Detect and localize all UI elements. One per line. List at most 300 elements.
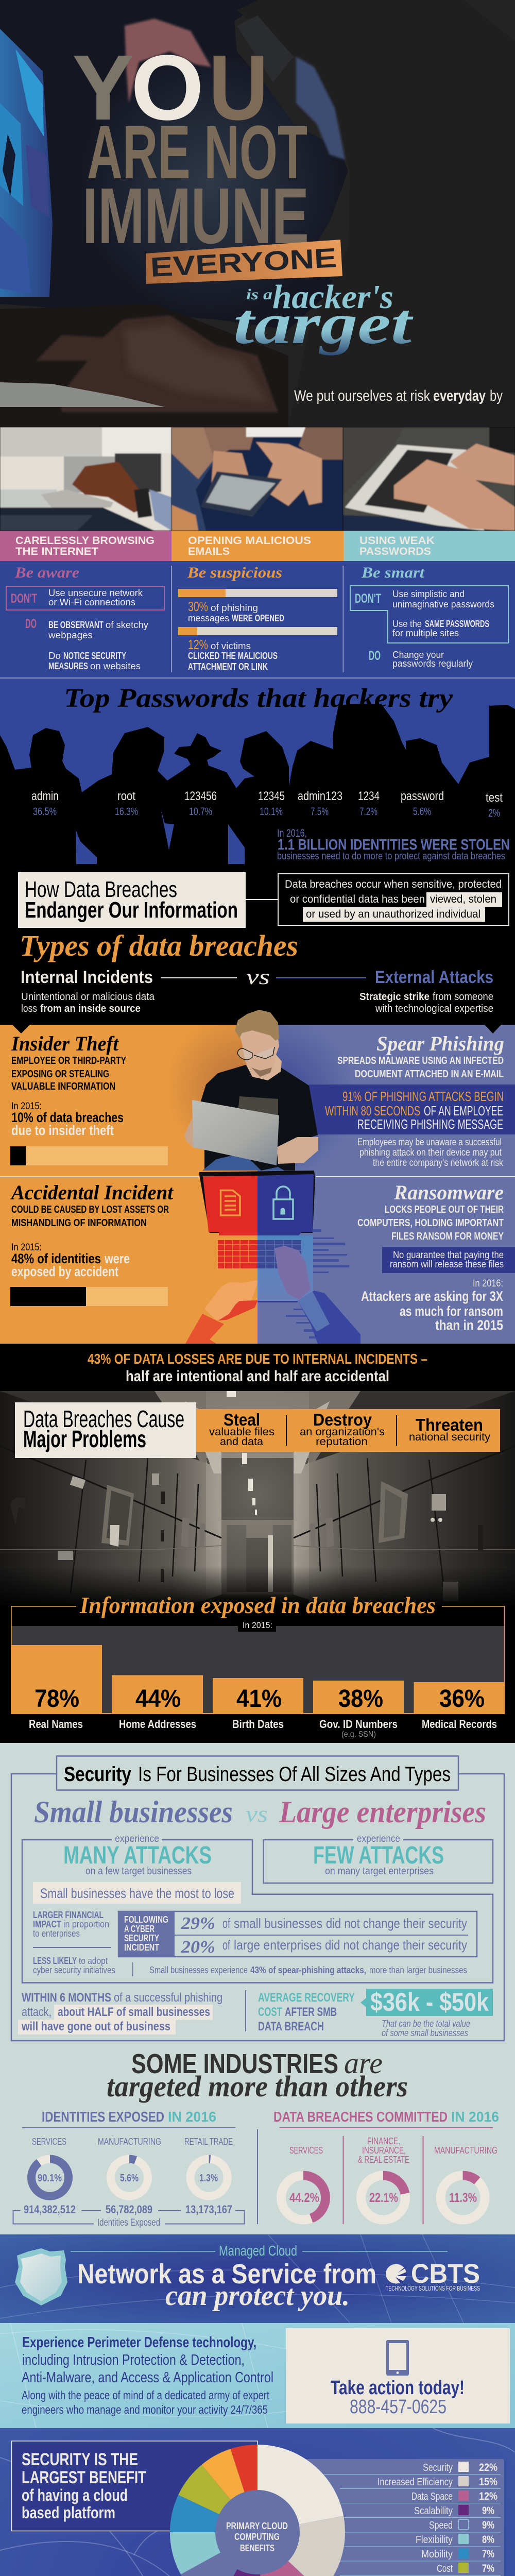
password labels: 1234: [358, 789, 380, 803]
call to action: 888-457-0625: [350, 2396, 447, 2418]
title: you are not immune: U: [209, 36, 268, 140]
card: ransomware: In 2016:: [473, 1278, 503, 1289]
card: insider theft: In 2015:: [11, 1101, 42, 1112]
column: be aware: MEASURES: [48, 661, 88, 671]
category: using weak passwords: PASSWORDS: [359, 546, 431, 557]
heading: security is for businesses: Security: [64, 1763, 132, 1786]
donut: services 90.1: 90.1%: [38, 2173, 62, 2184]
panel: data breaches committed: DATA BREACHES COMMITTED: [273, 2109, 448, 2125]
panel: small business attacks: experience: [115, 1834, 159, 1844]
panel: identities exposed: [13, 2109, 244, 2228]
password labels: test: [486, 791, 503, 805]
advice panel background: [0, 561, 515, 726]
heading: some industries: are: [344, 2046, 383, 2080]
callout: average recovery cost: That can be the total value: [382, 2019, 470, 2029]
pie chart: cloud computing benefits: [170, 2445, 345, 2576]
background streaks: [0, 2428, 515, 2576]
card: accidental incident: COULD BE CAUSED BY LOST ASSETS OR: [11, 1204, 169, 1215]
card: ransomware: [357, 1181, 515, 1333]
internal versus external: loss: [21, 1003, 37, 1014]
column: be smart: Use the: [392, 619, 422, 629]
heading: security is for businesses: Is For Businesses Of All Sizes And Types: [138, 1763, 451, 1786]
problems strip: reputation: [316, 1436, 368, 1448]
column: be aware: of sketchy: [106, 620, 148, 630]
notes: financial impact: to adopt: [79, 1956, 108, 1966]
icon: document: [220, 1190, 240, 1215]
man with laptop: [184, 1010, 318, 1171]
legend panel: Scalability: [414, 2505, 453, 2517]
cabinet seams: [71, 1458, 444, 1594]
column: be smart: [350, 564, 508, 669]
identities exposed bracket: Identities Exposed: [97, 2217, 160, 2228]
cabinet walls: [0, 1391, 221, 1643]
panel: data breaches committed: FINANCE,: [367, 2136, 400, 2146]
heading: how data breaches endanger: [18, 872, 246, 928]
column: be smart: DO: [369, 649, 381, 663]
card: accidental incident: Accidental Incident: [10, 1181, 174, 1204]
internal incidents callout: [0, 1344, 515, 1391]
card: ransomware: Ransomware: [393, 1181, 504, 1204]
problems strip: an organization's: [300, 1426, 385, 1438]
security section background: [0, 1743, 515, 2234]
internal incidents callout: half are intentional and half are accidental: [126, 1368, 389, 1385]
column: be smart: Use simplistic and: [392, 589, 465, 599]
panel: following a cyber incident: A CYBER: [124, 1924, 154, 1934]
box: security largest benefit: of having a cloud: [22, 2486, 128, 2504]
panel: following a cyber incident: 20%: [181, 1938, 215, 1957]
heading: Information exposed in data breaches: [79, 1592, 436, 1618]
legend panel: Security: [423, 2462, 453, 2473]
bar: 48 percent: [10, 1287, 168, 1306]
password labels: root: [117, 789, 135, 803]
column: be aware: DON'T: [11, 591, 37, 606]
panel: large enterprise attacks: experience: [357, 1834, 400, 1844]
callout: within six months: [18, 1990, 246, 2035]
card: accidental incident: [10, 1181, 174, 1306]
dark room background: [0, 0, 348, 330]
banner: managed cloud network as a service: [0, 2234, 515, 2323]
callout: within six months: WITHIN 6 MONTHS: [22, 1991, 111, 2005]
intro line: everyday: [433, 387, 486, 404]
is a hacker's target: target: [233, 292, 414, 356]
notes: financial impact: LARGER FINANCIAL: [33, 1910, 104, 1920]
heading: types of data breaches: Types of data breaches: [20, 929, 298, 962]
column: be aware: webpages: [48, 630, 93, 640]
donut: manufacturing 5.6: [111, 2159, 148, 2196]
problems strip: Threaten: [416, 1415, 483, 1434]
panel: small business attacks: MANY ATTACKS: [63, 1842, 212, 1869]
bar values: 41%: [236, 1685, 282, 1713]
legend panel: Data Space: [411, 2491, 453, 2502]
notes: financial impact: IMPACT: [33, 1919, 61, 1929]
internal versus external: from an inside source: [40, 1003, 141, 1014]
problems strip: [196, 1409, 500, 1452]
column: be smart: Change your: [392, 650, 444, 660]
panel: following a cyber incident: did not change their security: [326, 1916, 467, 1931]
legend panel: 7%: [482, 2563, 494, 2574]
notes: financial impact: more than larger businesses: [369, 1965, 467, 1975]
heading: some industries: targeted more than others: [107, 2070, 408, 2103]
stolen identities stat: In 2016,: [277, 827, 307, 839]
everyone label: [146, 240, 342, 284]
column: be smart: Be smart: [361, 564, 425, 581]
panel: small business attacks: [22, 1834, 493, 1982]
card: accidental incident: In 2015:: [11, 1242, 42, 1253]
wood streaks, blue side: [286, 1229, 349, 1338]
category: carelessly browsing: CARELESSLY BROWSING: [15, 535, 154, 547]
panel: large enterprise attacks: [264, 1834, 493, 1883]
box: security largest benefit: SECURITY IS THE: [22, 2450, 138, 2469]
security frame: [11, 1774, 504, 2041]
callout: within six months: attack,: [22, 2005, 52, 2019]
category: opening malicious emails: [171, 531, 344, 561]
identities exposed bracket: 56,782,089: [106, 2203, 152, 2216]
box: security largest benefit: based platform: [22, 2503, 115, 2522]
category: using weak passwords: USING WEAK: [359, 535, 435, 547]
definition box: [246, 874, 509, 925]
legend panel: Increased Efficiency: [377, 2477, 453, 2488]
column: be suspicious: CLICKED THE MALICIOUS: [188, 651, 278, 661]
bar: 10 percent: [10, 1146, 168, 1165]
donut: manufacturing 11.3: 11.3%: [449, 2191, 477, 2205]
hood and face silhouette: [237, 0, 515, 427]
pie chart: cloud computing benefits: COMPUTING: [234, 2532, 280, 2542]
donut: retail 1.3: [191, 2159, 228, 2196]
panel: data breaches committed: SERVICES: [289, 2145, 323, 2156]
horizontal divider between rows: [0, 1176, 515, 1177]
perimeter defense band: including Intrusion Protection & Detection,: [22, 2352, 245, 2368]
banner: managed cloud network as a service: Managed Cloud: [219, 2243, 297, 2259]
category: carelessly browsing: THE INTERNET: [15, 546, 98, 557]
column: be smart: unimaginative passwords: [392, 599, 494, 609]
problems strip: Steal: [224, 1410, 260, 1429]
panel: following a cyber incident: 29%: [181, 1914, 215, 1933]
panel: large enterprise attacks: FEW ATTACKS: [313, 1842, 444, 1869]
bars: [11, 1645, 505, 1714]
hero section: [0, 0, 515, 427]
password percentages: 10.1%: [260, 806, 283, 818]
title: you are not immune: Y: [72, 36, 134, 140]
logo: CBTS: CBTS: [411, 2259, 480, 2289]
ceiling: [0, 1391, 515, 1494]
perimeter defense band: engineers who manage and monitor your activity 24/7/365: [22, 2403, 268, 2416]
callout: average recovery cost: [258, 1988, 493, 2038]
column: be suspicious: Be suspicious: [187, 564, 282, 581]
perimeter defense band: [0, 2323, 515, 2428]
perimeter defense band: Anti-Malware, and Access & Application Control: [22, 2369, 273, 2386]
password percentages: 7.2%: [359, 806, 377, 818]
callout: average recovery cost: of some small businesses: [382, 2028, 468, 2038]
blue hand and sleeve: [274, 1246, 360, 1344]
labels and handles: [70, 1476, 85, 1489]
how breaches section background: [0, 864, 515, 1025]
category: using weak passwords: [344, 531, 515, 561]
category: opening malicious emails: OPENING MALICIOUS: [188, 535, 311, 547]
laptop lid: [192, 1096, 284, 1171]
bar values: 78%: [35, 1685, 79, 1713]
title: you are not immune: [72, 36, 309, 260]
callout: average recovery cost: AFTER SMB: [285, 2005, 337, 2019]
internal versus external: Unintentional or malicious data: [21, 991, 155, 1003]
donut: finance 22.1: [361, 2176, 405, 2220]
internal versus external: [21, 965, 493, 1014]
photo: phone in hands: [171, 427, 343, 531]
column: be aware: NOTICE SECURITY: [63, 651, 126, 661]
problems strip: national security: [409, 1431, 491, 1443]
column: be suspicious: of victims: [211, 641, 251, 651]
icon: padlock: [273, 1187, 293, 1219]
legend panel: 9%: [482, 2505, 494, 2517]
panel: following a cyber incident: FOLLOWING: [124, 1914, 168, 1925]
small businesses vs large enterprises: vs: [246, 1801, 268, 1827]
card: insider theft: VALUABLE INFORMATION: [11, 1081, 115, 1092]
duotone laptop illustration: [185, 1171, 360, 1344]
intro line: by: [490, 387, 503, 404]
card: spear phishing: Spear Phishing: [376, 1032, 504, 1055]
legend panel: Mobility: [421, 2549, 453, 2560]
column: be aware: Do: [48, 651, 61, 661]
internal versus external: External Attacks: [375, 968, 493, 987]
card: insider theft: due to insider theft: [11, 1123, 114, 1138]
column: be aware: Use unsecure network: [48, 588, 143, 598]
stolen identities stat: [277, 827, 510, 862]
definition box: or confidential data has been: [290, 893, 425, 905]
bar: 30 percent opened: [178, 589, 337, 597]
password percentages: [33, 806, 500, 819]
internal versus external: Strategic strike: [359, 991, 430, 1003]
problems strip: Destroy: [313, 1410, 372, 1429]
category: carelessly browsing: [0, 531, 171, 561]
icon: phone: [386, 2340, 409, 2376]
column: be aware: or Wi-Fi connections: [48, 597, 135, 607]
problems strip: valuable files: [209, 1426, 274, 1438]
donut: services 44.2: 44.2%: [289, 2191, 319, 2205]
column: be suspicious: of phishing: [211, 603, 258, 613]
definition box: viewed, stolen: [430, 893, 496, 905]
heading: some industries: [107, 2046, 408, 2103]
callout: within six months: will have gone out of business: [21, 2020, 170, 2033]
is a hacker's target: [233, 278, 414, 356]
logo: CBTS: [386, 2259, 480, 2292]
column: be aware: BE OBSERVANT: [48, 620, 104, 630]
panel: large enterprise attacks: on many target enterprises: [325, 1866, 434, 1877]
cloud benefits section: [0, 2428, 515, 2576]
bar values: 44%: [135, 1685, 181, 1713]
panel: following a cyber incident: [118, 1911, 477, 1957]
bar labels: Medical Records: [422, 1718, 497, 1731]
panel: identities exposed: RETAIL TRADE: [184, 2137, 233, 2147]
notes: financial impact: to enterprises: [33, 1928, 80, 1939]
internal versus external: Internal Incidents: [21, 968, 153, 987]
heading: data breaches cause major problems: [15, 1402, 196, 1458]
legend panel: Cost: [437, 2563, 453, 2574]
title: you are not immune: O: [131, 36, 204, 140]
panel: identities exposed: MANUFACTURING: [98, 2137, 161, 2147]
internal versus external: with technological expertise: [375, 1003, 493, 1014]
is a hacker's target: is a: [246, 286, 272, 303]
legend panel: [305, 2459, 504, 2576]
bar: 12 percent clicked: [178, 627, 337, 635]
box: security largest benefit: [11, 2441, 258, 2531]
column: be smart: for multiple sites: [392, 628, 459, 638]
password labels: admin123: [298, 789, 342, 803]
chart: information exposed: [0, 1592, 515, 1743]
split panel: orange internal side: [0, 1025, 258, 1344]
small businesses vs large enterprises: [34, 1795, 486, 1829]
identities exposed bracket: 13,173,167: [185, 2203, 232, 2216]
panel: following a cyber incident: did not change their security: [325, 1937, 467, 1953]
legend panel: 7%: [482, 2548, 494, 2560]
heading: Top Passwords that hackers try: [64, 684, 453, 713]
bar labels: Birth Dates: [232, 1718, 284, 1731]
category: opening malicious emails: EMAILS: [188, 546, 230, 557]
hair: [235, 1010, 279, 1041]
callout: within six months: of a successful phishing: [114, 1991, 222, 2005]
password percentages: 2%: [488, 807, 500, 819]
column: be aware: on websites: [90, 661, 141, 671]
card: accidental incident: MISHANDLING OF INFORMATION: [11, 1217, 147, 1229]
donut: services 90.1: [31, 2159, 68, 2196]
card: insider theft: Insider Theft: [11, 1032, 119, 1055]
bar labels: Real Names: [29, 1718, 83, 1731]
notes: financial impact: 43% of spear-phishing attacks,: [250, 1965, 366, 1975]
panel: following a cyber incident: small businesses: [234, 1916, 322, 1931]
panel: data breaches committed: IN 2016: [451, 2109, 499, 2125]
donut: manufacturing 11.3: [441, 2176, 485, 2220]
small businesses vs large enterprises: Large enterprises: [279, 1795, 486, 1829]
raised hand behind title: [125, 19, 211, 103]
card: accidental incident: were: [104, 1251, 130, 1266]
column: be suspicious: 30%: [188, 599, 208, 614]
column: be smart: SAME PASSWORDS: [425, 619, 489, 629]
heading: data breaches cause major problems: Major Problems: [23, 1426, 146, 1452]
year tag: In 2015:: [243, 1620, 272, 1630]
title: you are not immune: IMMUNE: [82, 172, 309, 260]
heading: some industries: SOME INDUSTRIES: [131, 2048, 338, 2079]
column: be smart: passwords regularly: [392, 658, 473, 669]
intro line: We put ourselves at risk: [294, 387, 431, 404]
heading: data breaches cause major problems: Data Breaches Cause: [23, 1405, 184, 1432]
password percentages: 7.5%: [311, 806, 329, 818]
notes: financial impact: Small businesses experience: [149, 1965, 248, 1975]
photo: browsing the internet: [0, 427, 171, 531]
call to action: Take action today!: [331, 2377, 465, 2399]
pie chart: cloud computing benefits: BENEFITS: [240, 2543, 274, 2553]
bar values: 36%: [439, 1685, 485, 1713]
box: security largest benefit: LARGEST BENEFIT: [22, 2468, 146, 2487]
small businesses vs large enterprises: Small businesses: [34, 1795, 233, 1829]
password labels: password: [401, 789, 444, 803]
column: be aware: Be aware: [14, 564, 79, 581]
notes: financial impact: in proportion: [63, 1919, 109, 1929]
donut: retail 1.3: 1.3%: [199, 2173, 218, 2184]
legend panel: 15%: [479, 2476, 497, 2488]
internal versus external: vs: [246, 965, 270, 989]
panel: data breaches committed: & REAL ESTATE: [358, 2155, 409, 2165]
panel: identities exposed: IN 2016: [168, 2109, 216, 2125]
callout: average recovery cost: $36k - $50k: [370, 1988, 489, 2016]
password labels: 12345: [258, 789, 285, 803]
bar labels: [29, 1718, 497, 1731]
callout: average recovery cost: AVERAGE RECOVERY: [258, 1991, 355, 2005]
photo: server room: [0, 1391, 515, 1605]
panel: following a cyber incident: large enterprises: [234, 1937, 322, 1953]
bar values: [35, 1685, 485, 1713]
card: ransomware: than in 2015: [435, 1317, 503, 1333]
identities exposed bracket: [13, 2203, 244, 2228]
foreground hand on keyboard: [0, 304, 288, 427]
icon: shield: [15, 2248, 67, 2306]
notes: financial impact: cyber security initiatives: [33, 1965, 115, 1975]
definition box: Data breaches occur when sensitive, protected: [285, 878, 502, 890]
donut: finance 22.1: 22.1%: [369, 2191, 398, 2205]
panel: identities exposed: SERVICES: [32, 2137, 66, 2147]
title: you are not immune: ARE NOT: [87, 110, 307, 195]
password percentages: 36.5%: [33, 806, 57, 818]
password labels: [31, 789, 503, 805]
card: accidental incident: exposed by accident: [11, 1264, 118, 1279]
legend panel: 8%: [482, 2534, 494, 2546]
card: insider theft: EXPOSING OR STEALING: [11, 1069, 109, 1080]
is a hacker's target: hacker's: [272, 278, 393, 316]
ceiling lights: [227, 1391, 257, 1515]
password percentages: 5.6%: [413, 806, 431, 818]
panel: data breaches committed: INSURANCE,: [362, 2145, 406, 2156]
password labels: admin: [31, 789, 59, 803]
bar values: 38%: [338, 1685, 383, 1713]
callout: within six months: about HALF of small businesses: [58, 2005, 210, 2019]
legend panel: 22%: [479, 2462, 497, 2473]
neck and face: [246, 1051, 282, 1080]
perimeter defense band: Along with the peace of mind of a dedicated army of expert: [22, 2388, 269, 2402]
dark stat band behind phishing figure: [309, 1084, 515, 1134]
column: be suspicious: messages: [188, 613, 229, 623]
legend panel: 12%: [479, 2490, 497, 2502]
heading: security is for businesses: [57, 1756, 458, 1790]
banner: managed cloud network as a service: can protect you.: [165, 2280, 350, 2312]
highlight: most to lose: [33, 1882, 241, 1904]
panel: following a cyber incident: SECURITY: [124, 1933, 159, 1943]
notes: financial impact: LESS LIKELY: [33, 1956, 77, 1966]
internal incidents callout: 43% OF DATA LOSSES ARE DUE TO INTERNAL INCIDENTS –: [88, 1351, 427, 1367]
control panels: [101, 1485, 134, 1546]
keyboard and palm rest: [218, 1235, 313, 1302]
split panel: violet external side: [258, 1025, 515, 1344]
internal versus external: from someone: [433, 991, 493, 1003]
everyone label: EVERYONE: [150, 243, 337, 283]
panel: following a cyber incident: of: [222, 1937, 231, 1953]
password percentages: 10.7%: [189, 806, 212, 818]
panel: small business attacks: on a few target businesses: [85, 1866, 192, 1877]
problems strip: and data: [220, 1436, 263, 1448]
perimeter defense band: Experience Perimeter Defense technology,: [22, 2334, 256, 2351]
column: be suspicious: [178, 564, 337, 672]
heading: how data breaches endanger: How Data Breaches: [25, 877, 177, 902]
call to action: [286, 2328, 510, 2424]
glasses: [237, 1047, 274, 1060]
callout: average recovery cost: COST: [258, 2005, 282, 2019]
donut: services 44.2: [281, 2176, 325, 2220]
password percentages: 16.3%: [115, 806, 138, 818]
column: be aware: [6, 564, 164, 671]
pie chart: cloud computing benefits: PRIMARY CLOUD: [226, 2521, 288, 2531]
banner: managed cloud network as a service: Network as a Service from: [77, 2259, 376, 2290]
card: insider theft: 10% of data breaches: [11, 1110, 124, 1125]
computer screen glow: [0, 29, 53, 297]
panel: following a cyber incident: of: [222, 1916, 231, 1931]
card: insider theft: EMPLOYEE OR THIRD-PARTY: [11, 1055, 127, 1066]
red hand and sleeve: [185, 1280, 258, 1344]
